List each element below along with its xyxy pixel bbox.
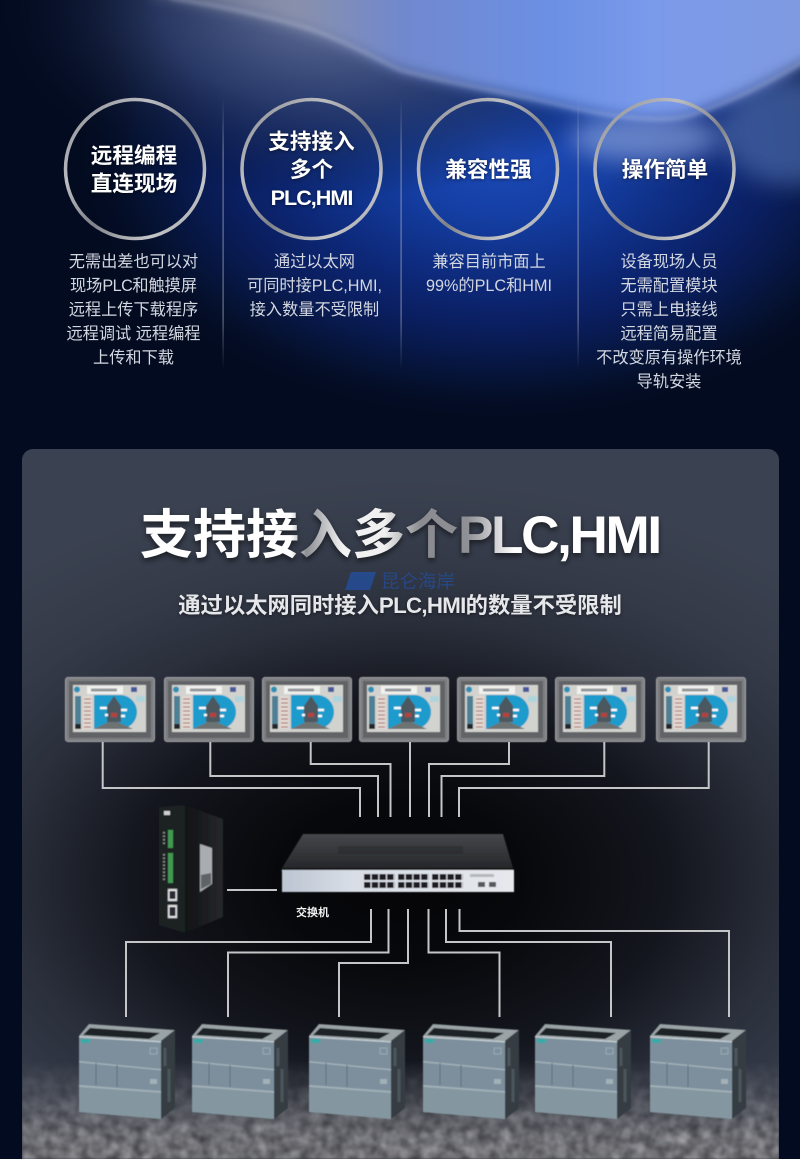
panel title: 支持接入多个PLC,HMI: [140, 506, 660, 565]
feature 4 text: 不改变原有操作环境: [596, 349, 742, 367]
feature 1 text: 无需出差也可以对: [69, 253, 198, 271]
feature 3 text: 兼容目前市面上: [432, 253, 546, 271]
icon: network switch: [281, 834, 514, 892]
feature 1 text: 上传和下载: [93, 349, 174, 367]
feature 3 text: [426, 252, 552, 295]
PLC controllers: [79, 1024, 746, 1119]
feature 1 text: 远程上传下载程序: [69, 301, 198, 319]
feature 1 heading: [91, 143, 178, 196]
feature 4 text: 无需配置模块: [620, 277, 718, 295]
feature 4 text: 导轨安装: [637, 373, 701, 391]
feature 2 heading: PLC,HMI: [271, 185, 352, 210]
switch label: 交换机: [296, 905, 329, 919]
connection lines: switch to PLC: [126, 909, 729, 1017]
feature 2 heading: 多个: [290, 157, 333, 182]
feature 2 heading: 支持接入: [268, 129, 355, 154]
feature 4 heading: 操作简单: [622, 157, 708, 182]
panel: multi-device network: [22, 449, 779, 1159]
feature 2 text: [247, 253, 382, 319]
feature 1 text: 远程调试 远程编程: [66, 325, 200, 343]
feature 3 text: 99%的PLC和HMI: [426, 277, 552, 295]
feature 1 heading: 直连现场: [91, 171, 177, 196]
background: blue light glow: [50, 0, 800, 398]
column dividers: [222, 104, 579, 366]
feature 2 text: 通过以太网: [274, 253, 355, 271]
panel subtitle: 通过以太网同时接入PLC,HMI的数量不受限制: [178, 593, 622, 618]
feature 4 text: 只需上电接线: [620, 301, 718, 319]
feature 2 heading: [268, 129, 355, 210]
watermark logo: [345, 571, 455, 592]
watermark logo: 昆仑海岸: [381, 571, 455, 592]
feature 2 text: 可同时接PLC,HMI,: [247, 277, 382, 295]
feature 2 text: 接入数量不受限制: [250, 301, 379, 319]
connection line: gateway to switch: [227, 889, 277, 891]
HMI touch screens: [66, 678, 746, 742]
feature 4 text: 远程简易配置: [620, 325, 718, 343]
feature 4 text: [596, 252, 742, 391]
feature rings: [64, 98, 736, 240]
feature 1 heading: 远程编程: [91, 143, 177, 168]
connection lines: HMI to switch: [103, 742, 709, 817]
feature 4 text: 设备现场人员: [620, 253, 718, 271]
feature 1 text: 现场PLC和触摸屏: [70, 277, 197, 295]
feature 1 text: [66, 253, 200, 367]
icon: ethernet gateway: [159, 805, 223, 933]
feature 3 heading: 兼容性强: [445, 157, 532, 182]
